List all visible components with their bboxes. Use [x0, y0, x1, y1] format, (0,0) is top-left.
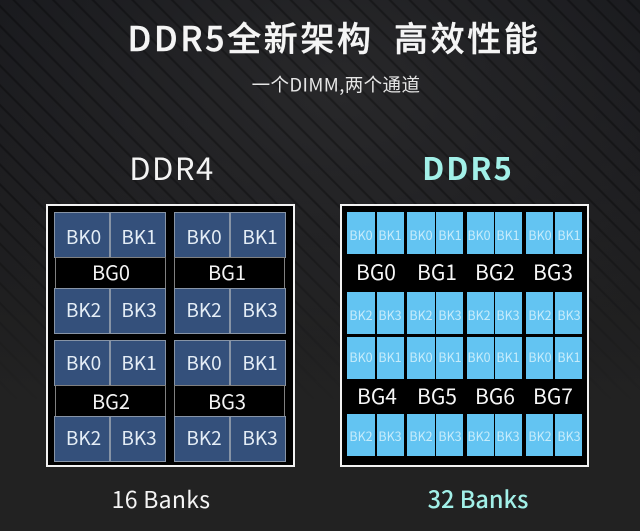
- bank group: BG2: BK3: [121, 424, 157, 451]
- bank group: BG4: BK1: [378, 347, 402, 366]
- bank group: BG0: BK1: [378, 225, 402, 244]
- bank group: BG1: BK2: [409, 305, 433, 324]
- panel: DDR4 bank groups: [47, 205, 294, 466]
- bank group: BG7: BG7: [533, 381, 573, 411]
- bank group: BG1: BK0: [186, 223, 222, 250]
- bank group: BG3: BK1: [242, 349, 278, 376]
- bank group: BG2: [467, 212, 522, 334]
- bank group: BG4: BG4: [357, 381, 397, 411]
- bank group: BG0: BK0: [66, 223, 101, 250]
- caption: 16 Banks: 16 Banks: [112, 481, 210, 515]
- bank group: BG2: BK0: [467, 225, 491, 244]
- bank group: BG6: BK3: [496, 426, 520, 445]
- bank group: BG6: BG6: [475, 381, 515, 411]
- bank group: BG7: BK3: [557, 426, 581, 445]
- bank group: BG1: BK1: [438, 225, 462, 244]
- bank group: BG5: BK1: [438, 347, 462, 366]
- bank group: BG0: BK3: [378, 305, 402, 324]
- bank group: BG4: BK0: [349, 347, 373, 366]
- subtitle: 一个DIMM,两个通道: [252, 72, 420, 98]
- bank group: BG5: BG5: [417, 381, 457, 411]
- bank group: BG6: BK1: [496, 347, 520, 366]
- bank group: BG2: BG2: [92, 386, 130, 415]
- bank group: BG2: [54, 340, 166, 462]
- bank group: BG0: BK2: [66, 296, 101, 323]
- bank group: BG2: BK2: [66, 424, 101, 451]
- bank group: BG0: [347, 212, 404, 334]
- bank group: BG1: [407, 212, 463, 334]
- bank group: BG3: BK2: [528, 305, 552, 324]
- bank group: BG0: BG0: [92, 257, 130, 286]
- bank group: BG4: BK3: [378, 426, 402, 445]
- bank group: BG0: BK3: [121, 296, 157, 323]
- bank group: BG7: BK2: [528, 426, 552, 445]
- bank group: BG2: BK3: [496, 305, 520, 324]
- bank group: BG1: BG1: [417, 257, 457, 287]
- bank group: BG2: BK1: [121, 349, 157, 376]
- heading: DDR5: DDR5: [422, 144, 514, 189]
- bank group: BG3: BK1: [557, 225, 581, 244]
- bank group: BG3: BK0: [186, 349, 222, 376]
- bank group: BG1: BK0: [409, 225, 433, 244]
- bank group: BG2: BK0: [66, 349, 101, 376]
- bank group: BG1: BG1: [208, 257, 246, 286]
- bank group: BG3: BG3: [533, 257, 573, 287]
- bank group: BG5: BK2: [409, 426, 433, 445]
- bank group: BG2: BK1: [496, 225, 520, 244]
- bank group: BG3: BK0: [528, 225, 552, 244]
- bank group: BG4: BK2: [349, 426, 373, 445]
- bank group: BG7: BK1: [557, 347, 581, 366]
- caption: 32 Banks: 32 Banks: [428, 481, 528, 515]
- bank group: BG2: BG2: [475, 257, 515, 287]
- bank group: BG0: [54, 212, 166, 334]
- heading: DDR4: DDR4: [129, 144, 215, 189]
- bank group: BG3: BG3: [208, 386, 246, 415]
- bank group: BG3: BK2: [186, 424, 222, 451]
- bank group: BG6: BK2: [467, 426, 491, 445]
- bank group: BG2: BK2: [467, 305, 491, 324]
- bank group: BG0: BK2: [349, 305, 373, 324]
- bank group: BG5: BK0: [409, 347, 433, 366]
- bank group: BG7: [526, 337, 582, 456]
- bank group: BG5: [407, 337, 463, 456]
- bank group: BG1: BK3: [438, 305, 462, 324]
- bank group: BG5: BK3: [438, 426, 462, 445]
- bank group: BG3: [174, 340, 286, 462]
- bank group: BG6: [467, 337, 522, 456]
- bank group: BG3: BK3: [557, 305, 581, 324]
- bank group: BG1: BK1: [242, 223, 278, 250]
- panel: DDR5 bank groups: [341, 205, 588, 466]
- bank group: BG3: BK3: [242, 424, 278, 451]
- bank group: BG1: BK2: [186, 296, 222, 323]
- bank group: BG7: BK0: [528, 347, 552, 366]
- title: DDR5全新架构 高效性能: [128, 12, 540, 61]
- bank group: BG4: [347, 337, 404, 456]
- bank group: BG6: BK0: [467, 347, 491, 366]
- bank group: BG1: BK3: [242, 296, 278, 323]
- bank group: BG3: [526, 212, 582, 334]
- bank group: BG0: BK1: [121, 223, 157, 250]
- bank group: BG1: [174, 212, 286, 334]
- bank group: BG0: BK0: [349, 225, 373, 244]
- bank group: BG0: BG0: [356, 257, 396, 287]
